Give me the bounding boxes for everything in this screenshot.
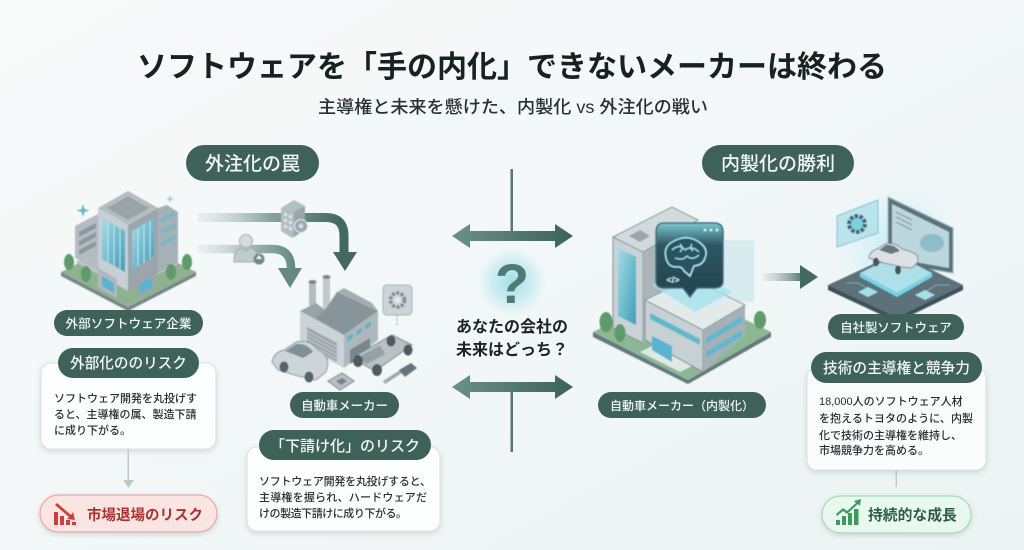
- callout: market exit risk: [40, 495, 217, 532]
- card: outsourcing risk: ると、主導権の属、製造下請: [54, 407, 197, 421]
- icon: in-house automaker building with AI brain: [593, 207, 771, 384]
- text: question: あなたの会社の: [456, 318, 568, 336]
- icon: in-house software platform: [828, 177, 965, 322]
- heading: in-house victory: 内製化の勝利: [721, 153, 835, 175]
- card: technology leadership: 市場競争力を高める。: [819, 443, 929, 457]
- icon: tool: [383, 363, 417, 384]
- icon: brain bubble: </>: [666, 275, 680, 285]
- arrow: lower double arrow: [452, 375, 573, 452]
- label: automaker: [290, 392, 399, 418]
- label: in-house software: 自社製ソフトウェア: [840, 320, 952, 335]
- callout: sustainable growth: 持続的な成長: [868, 506, 957, 524]
- panel: center question: [452, 169, 573, 452]
- card: technology leadership: [807, 352, 986, 470]
- icon: external software company building: [61, 191, 196, 311]
- icon: small office building: [281, 200, 308, 238]
- card: technology leadership: 技術の主導権と競争力: [823, 359, 970, 377]
- label: in-house automaker: 自動車メーカー（内製化）: [610, 398, 754, 413]
- card: technology leadership: 化で技術の主導権を維持し、: [819, 428, 962, 442]
- icon: brain bubble: [656, 223, 723, 297]
- arrow: risk to market exit: [123, 449, 134, 488]
- label: external software company: 外部ソフトウェア企業: [66, 316, 192, 331]
- callout: market exit risk: 市場退場のリスク: [87, 506, 203, 524]
- arrow: talent flow to manufacturer: [198, 249, 302, 288]
- label: external software company: [54, 310, 203, 336]
- subtitle: 主導権と未来を懸けた、内製化 vs 外注化の戦い: [318, 97, 708, 117]
- heading: outsourcing trap: 外注化の罠: [205, 153, 300, 175]
- label: in-house automaker: [598, 392, 766, 418]
- arrow: software flow to manufacturer: [198, 218, 357, 271]
- icon: automaker factory with car and parts: [272, 275, 417, 390]
- card: subcontractor risk: けの製造下請けに成り下がる。: [259, 506, 407, 520]
- heading: in-house victory: [702, 145, 854, 181]
- icon: question mark: ?: [495, 252, 529, 315]
- card: technology leadership: 18,000人のソフトウェア人材: [819, 395, 963, 408]
- text: question: [456, 318, 568, 359]
- label: automaker: 自動車メーカー: [301, 398, 388, 413]
- panel: outsourcing trap: [40, 145, 440, 532]
- card: subcontractor risk: 主導権を握られ、ハードウェアだ: [259, 490, 427, 504]
- arrow: upper double arrow: [452, 169, 573, 248]
- icon: person: [234, 234, 264, 264]
- card: outsourcing risk: [41, 348, 216, 449]
- icon: chassis: [352, 335, 412, 376]
- label: in-house software: [828, 314, 964, 340]
- callout: sustainable growth: [822, 496, 971, 533]
- text: question: 未来はどっち？: [456, 341, 568, 359]
- card: technology leadership: を抱えるトヨタのように、内製: [819, 411, 973, 425]
- title: ソフトウェアを「手の内化」できないメーカーは終わる: [137, 51, 887, 84]
- icon: chip: [328, 373, 354, 390]
- icon: gear bubble: [383, 285, 412, 326]
- panel: in-house victory: [593, 145, 986, 533]
- icon: question mark: [476, 246, 548, 318]
- card: outsourcing risk: 外部化ののリスク: [70, 355, 187, 372]
- card: subcontractor risk: ソフトウェア開発を丸投げすると、: [259, 474, 431, 488]
- card: subcontractor risk: 「下請け化」のリスク: [270, 438, 420, 455]
- card: subcontractor risk: [247, 430, 440, 531]
- icon: rising chart: [836, 499, 861, 525]
- heading: outsourcing trap: [186, 145, 319, 181]
- icon: car: [272, 341, 328, 382]
- icon: platform car: [869, 244, 918, 274]
- card: outsourcing risk: ソフトウェア開発を丸投げす: [54, 391, 197, 405]
- icon: falling chart: [54, 503, 76, 525]
- card: outsourcing risk: に成り下がる。: [54, 423, 131, 437]
- arrow: to in-house software: [763, 265, 818, 289]
- connector: card to growth: [896, 470, 897, 487]
